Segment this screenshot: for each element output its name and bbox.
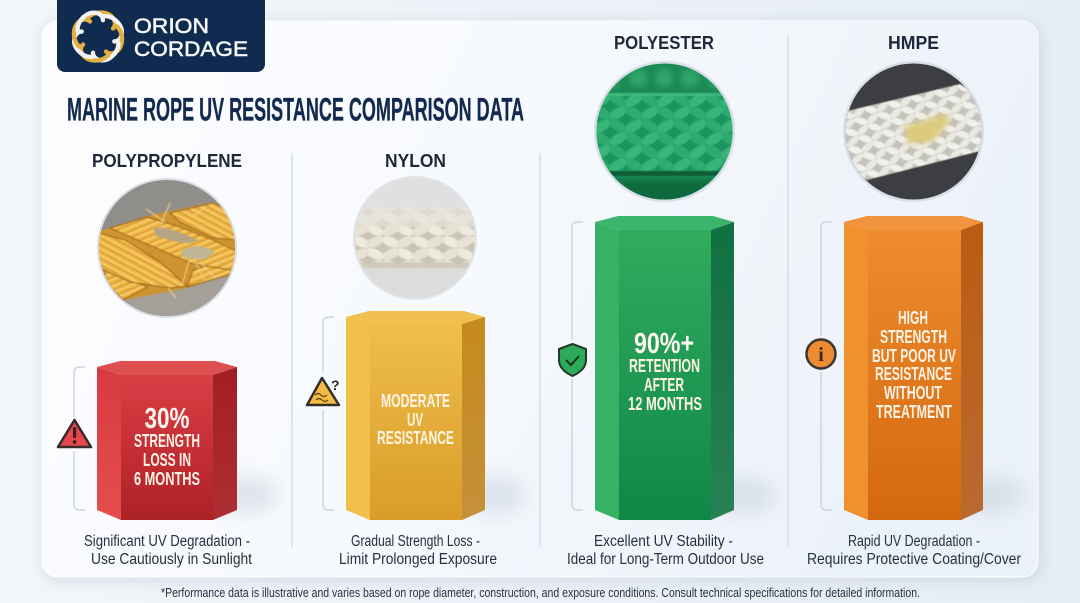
- bracket: [572, 222, 583, 510]
- icon: green shield with check: [559, 344, 586, 376]
- bar text: AFTER: [644, 375, 684, 395]
- bar text: LOSS IN: [143, 450, 191, 470]
- ground shadow: [708, 477, 776, 513]
- caption: Limit Prolonged Exposure: [339, 551, 497, 568]
- caption: [84, 533, 253, 568]
- bar text: [377, 391, 454, 448]
- bar: orange hexagonal prism: [844, 216, 983, 520]
- bar text: BUT POOR UV: [872, 346, 956, 366]
- heading: nylon: NYLON: [385, 151, 446, 171]
- caption: [339, 533, 497, 568]
- column: polyester: [559, 33, 776, 568]
- logo wordmark: [134, 14, 248, 61]
- bar text: TREATMENT: [876, 402, 952, 422]
- ground shadow: [459, 477, 527, 513]
- bar text: HIGH: [898, 308, 928, 328]
- caption: Rapid UV Degradation -: [848, 533, 980, 550]
- icon: interlaced rope ring: [69, 7, 127, 66]
- ground shadow: [957, 477, 1025, 513]
- bar text: [628, 328, 702, 414]
- caption: [807, 533, 1021, 568]
- bar text: RESISTANCE: [377, 428, 454, 448]
- icon: info circle: [806, 340, 836, 368]
- bar text: RESISTANCE: [875, 364, 952, 384]
- bar: red hexagonal prism: [97, 361, 237, 520]
- bar text: 30%: [144, 403, 190, 435]
- icon: warning triangle: [58, 420, 91, 447]
- bracket: [821, 222, 832, 510]
- bracket: [323, 317, 334, 510]
- bar text: 90%+: [634, 328, 694, 360]
- heading: polypropylene: POLYPROPYLENE: [92, 151, 242, 171]
- logo wordmark: ORION: [134, 14, 209, 38]
- icon: info circle: i: [818, 344, 824, 366]
- caption: Significant UV Degradation -: [84, 533, 250, 550]
- caption: Ideal for Long-Term Outdoor Use: [567, 551, 764, 568]
- bar text: MODERATE: [381, 391, 450, 411]
- bar text: 12 MONTHS: [628, 394, 702, 414]
- icon: caution triangle with waves and question mark: [307, 377, 340, 405]
- bar text: STRENGTH: [880, 327, 947, 347]
- column: polypropylene: [58, 151, 279, 568]
- column dividers: [292, 35, 788, 547]
- bar: green hexagonal prism: [595, 216, 734, 520]
- caption: [567, 533, 764, 568]
- bar text: 6 MONTHS: [134, 469, 200, 489]
- caption: Use Cautiously in Sunlight: [91, 551, 253, 568]
- photo: green braided rope: [594, 61, 735, 204]
- bar: yellow hexagonal prism: [346, 311, 485, 520]
- bar text: [872, 308, 956, 422]
- heading: hmpe: HMPE: [888, 33, 939, 53]
- bar text: [134, 403, 200, 489]
- photo: white rope with yellow stain: [843, 61, 984, 202]
- photo: white braided rope: [353, 176, 477, 301]
- heading: polyester: POLYESTER: [614, 33, 714, 53]
- bar text: STRENGTH: [134, 431, 200, 451]
- bar text: RETENTION: [629, 356, 700, 376]
- footnote: *Performance data is illustrative and varies based on rope diameter, construction, and exposure conditions. Consult technical specifications for detailed information.: [161, 585, 920, 600]
- logo wordmark: CORDAGE: [134, 37, 248, 61]
- bar text: UV: [407, 410, 423, 430]
- column: hmpe: [806, 33, 1025, 568]
- icon: caution triangle with waves and question mark: ?: [331, 377, 340, 393]
- column: nylon: [307, 151, 527, 568]
- logo badge: [57, 0, 265, 72]
- photo: frayed yellow rope: [95, 178, 238, 325]
- bar text: WITHOUT: [884, 383, 942, 403]
- caption: Gradual Strength Loss -: [351, 533, 480, 550]
- bracket: [74, 367, 85, 510]
- title: MARINE ROPE UV RESISTANCE COMPARISON DATA: [67, 92, 524, 128]
- ground shadow: [211, 477, 279, 513]
- caption: Excellent UV Stability -: [594, 533, 733, 550]
- caption: Requires Protective Coating/Cover: [807, 551, 1021, 568]
